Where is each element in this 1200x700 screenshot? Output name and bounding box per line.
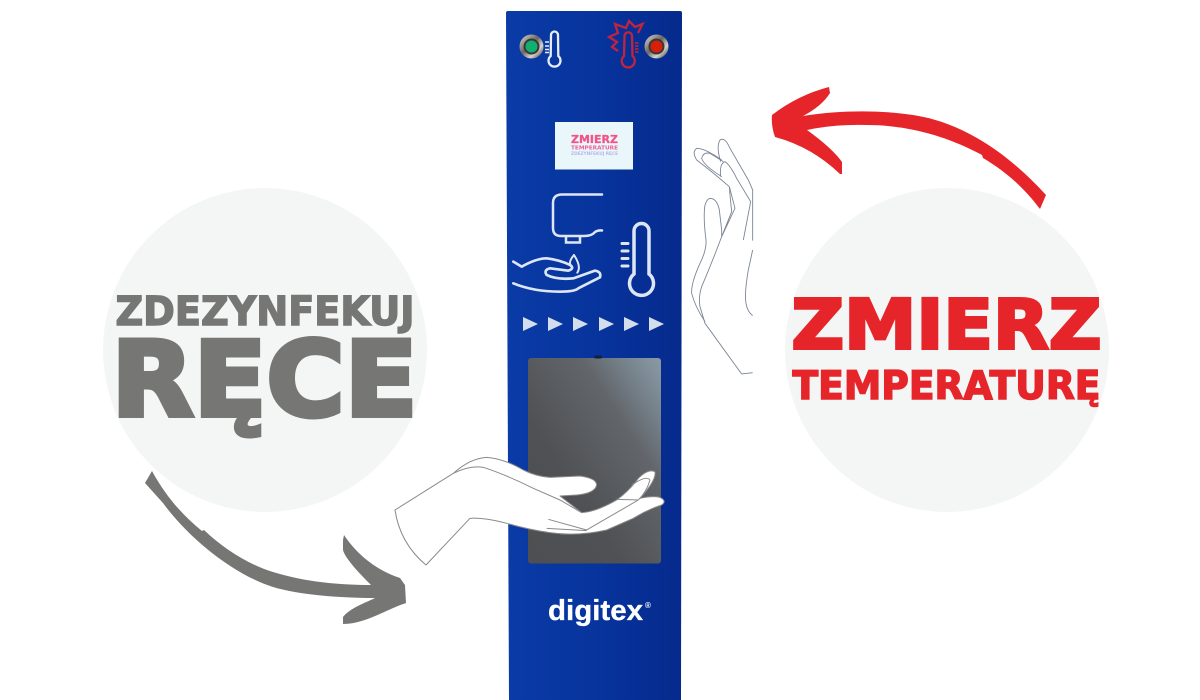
display screen	[555, 122, 633, 170]
icon: alert thermometer	[609, 21, 642, 67]
display screen: TEMPERATURE	[571, 146, 619, 152]
heading: temperature: TEMPERATURĘ	[792, 364, 1100, 409]
logo: digitex: digitex	[548, 595, 643, 627]
panel: kiosk	[506, 11, 682, 700]
illustration: lower hand	[395, 457, 664, 565]
indicator: green lamp	[520, 34, 544, 58]
icon: hand with drop	[513, 255, 600, 292]
illustration: upper hand	[692, 139, 753, 374]
arrow: red curved arrow	[772, 87, 1046, 209]
arrow: gray curved arrow	[145, 471, 406, 624]
heading: rece: RĘCE	[112, 320, 418, 440]
heading: zmierz: ZMIERZ	[792, 286, 1102, 366]
icon: large thermometer	[622, 224, 654, 295]
screen text: ZMIERZ	[571, 133, 618, 146]
icon: dispenser	[553, 194, 602, 242]
display screen: ZDEZYNFEKUJ RĘCE	[571, 151, 618, 156]
indicator: red lamp	[644, 34, 668, 58]
panel: right circle	[785, 188, 1109, 512]
arrows row	[523, 317, 664, 331]
logo: digitex: ®	[645, 601, 651, 610]
icon: normal thermometer	[545, 32, 560, 67]
heading: zdezynfekuj: ZDEZYNFEKUJ	[116, 289, 414, 335]
panel: left circle	[103, 188, 427, 512]
dispenser window	[528, 356, 661, 564]
